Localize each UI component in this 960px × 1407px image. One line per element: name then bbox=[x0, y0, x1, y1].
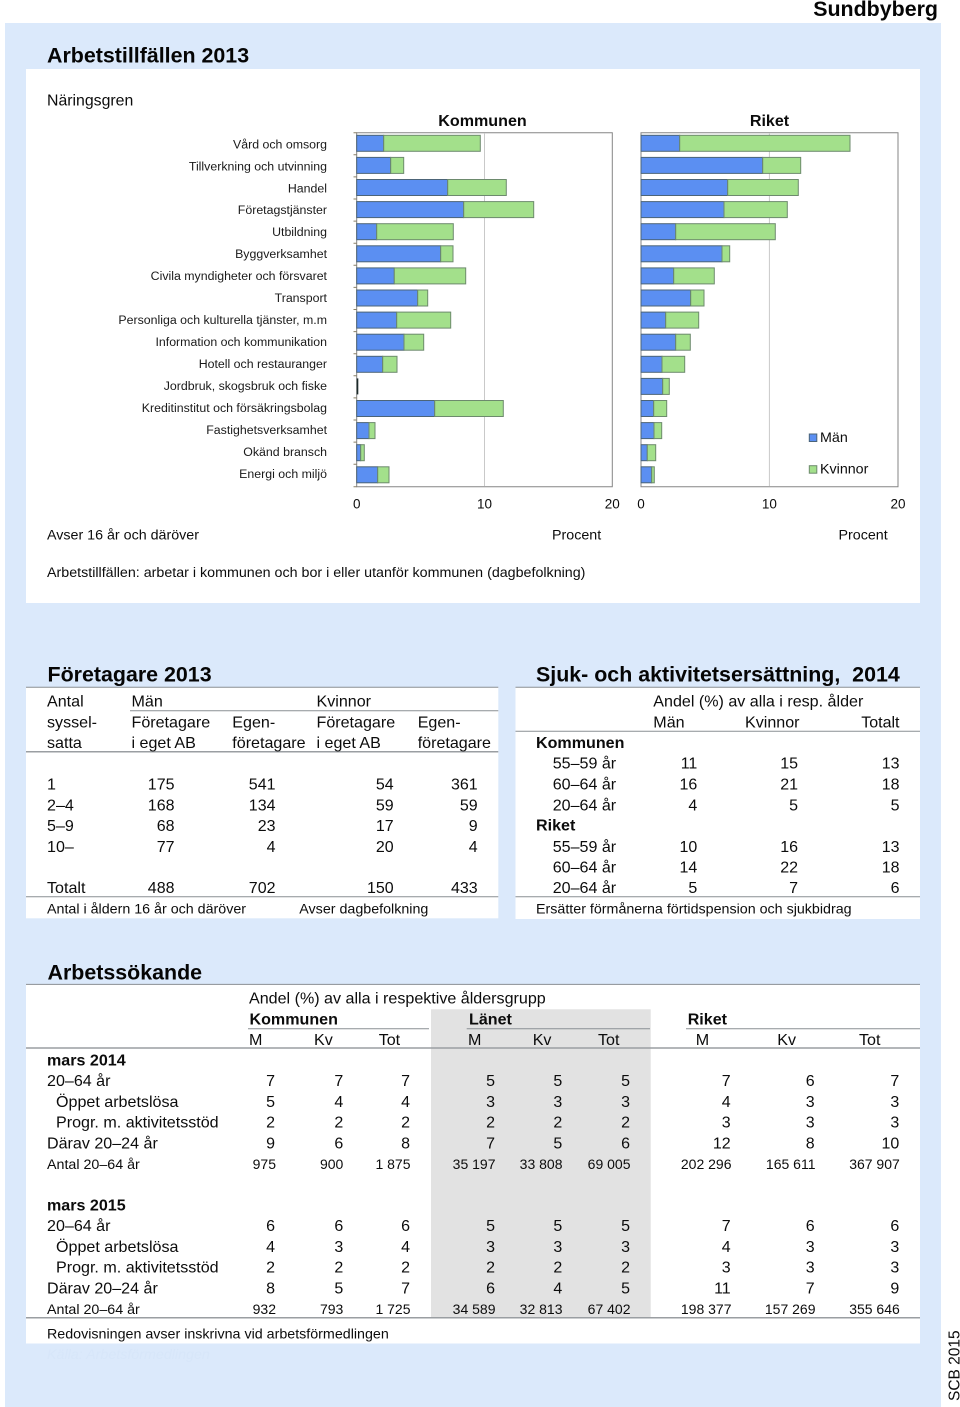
rows: mars 2015: 4 bbox=[266, 1239, 275, 1256]
rows: Riket: Riket bbox=[536, 817, 576, 835]
industry category labels: Information och kommunikation bbox=[155, 335, 327, 349]
rows: mars 2014 bbox=[47, 1052, 900, 1173]
rows: mars 2015: 5 bbox=[621, 1280, 630, 1298]
table rows: 54 bbox=[376, 776, 394, 794]
rows: mars 2015: 3 bbox=[890, 1260, 899, 1276]
rows: mars 2015: 4 bbox=[401, 1239, 410, 1256]
rows: mars 2014: 10 bbox=[882, 1136, 899, 1153]
panel: Arbetstillfällen 2013 bbox=[26, 43, 920, 603]
table rules bbox=[26, 984, 920, 1029]
rows: mars 2015: 932 bbox=[253, 1301, 276, 1317]
table header: Egen- bbox=[418, 713, 461, 731]
rows: mars 2014: 2 bbox=[553, 1114, 562, 1132]
rows: mars 2015: Antal 20–64 år bbox=[47, 1302, 140, 1318]
rows: mars 2014: 7 bbox=[401, 1073, 410, 1090]
rows: mars 2014: 975 bbox=[253, 1156, 276, 1172]
rows: Riket: 6 bbox=[891, 880, 900, 897]
rows: mars 2014: 3 bbox=[806, 1114, 815, 1132]
table rows: 20 bbox=[376, 839, 394, 856]
rows: Riket: 18 bbox=[882, 860, 900, 876]
table header: Riket bbox=[688, 1011, 728, 1029]
rows: mars 2014: 20–64 år bbox=[47, 1072, 111, 1090]
rows: mars 2015: 355 646 bbox=[849, 1301, 900, 1317]
table footnotes bbox=[47, 901, 428, 917]
table header: M bbox=[249, 1031, 262, 1049]
rows: mars 2015: 34 589 bbox=[453, 1301, 496, 1317]
rows: mars 2015: 3 bbox=[806, 1260, 815, 1276]
white card for job seekers table bbox=[26, 984, 920, 1344]
rows: mars 2014: 1 875 bbox=[375, 1156, 411, 1172]
rows: mars 2015: 3 bbox=[553, 1239, 562, 1256]
rows: mars 2014: 7 bbox=[722, 1073, 731, 1090]
rows: mars 2014: Antal 20–64 år bbox=[47, 1157, 140, 1173]
rows: mars 2015: Öppet arbetslösa bbox=[56, 1238, 179, 1256]
rows: mars 2014: 8 bbox=[806, 1136, 815, 1153]
table footnote: Ersätter förmånerna förtidspension och sjukbidrag bbox=[536, 901, 852, 917]
rows: mars 2014: 3 bbox=[621, 1094, 630, 1111]
rows: Riket: 7 bbox=[789, 880, 798, 897]
white card for employment chart bbox=[26, 69, 920, 603]
bar chart: Kommunen: Kommunen bbox=[438, 112, 527, 130]
rows: mars 2014: Progr. m. aktivitetsstöd bbox=[56, 1114, 219, 1132]
industry category labels: Handel bbox=[288, 181, 327, 195]
table rows: 4 bbox=[267, 839, 276, 856]
rows: mars 2014: 5 bbox=[486, 1073, 495, 1090]
rows: mars 2014: 7 bbox=[334, 1073, 343, 1090]
rows: mars 2015: 2 bbox=[486, 1260, 495, 1276]
table rows: 5–9 bbox=[47, 817, 74, 835]
rows: mars 2014: 3 bbox=[486, 1094, 495, 1111]
rows: mars 2014: 4 bbox=[401, 1094, 410, 1111]
industry category labels: Transport bbox=[275, 291, 328, 305]
rows: mars 2014: 4 bbox=[722, 1094, 731, 1111]
rows: mars 2015: mars 2015 bbox=[47, 1196, 126, 1214]
table header: i eget AB bbox=[316, 734, 381, 752]
table header: Kv bbox=[777, 1031, 796, 1049]
rows: mars 2014: 69 005 bbox=[588, 1156, 631, 1172]
rows: mars 2015: 3 bbox=[486, 1239, 495, 1256]
industry category labels: Hotell och restauranger bbox=[199, 357, 327, 371]
industry category labels: Tillverkning och utvinning bbox=[189, 159, 327, 173]
table header: Egen- bbox=[232, 713, 275, 731]
header rules bbox=[26, 1048, 920, 1318]
rows: mars 2014: 165 611 bbox=[766, 1156, 816, 1172]
table header bbox=[47, 692, 491, 752]
table rows: 1 bbox=[47, 776, 56, 794]
rows: Kommunen: 4 bbox=[688, 797, 697, 814]
rows: Kommunen: 13 bbox=[882, 756, 900, 773]
rows: mars 2015: 8 bbox=[266, 1280, 275, 1298]
rows: mars 2014: 2 bbox=[621, 1114, 630, 1132]
industry category labels: Företagstjänster bbox=[238, 203, 327, 217]
table header: Kv bbox=[533, 1031, 551, 1049]
chart footnotes bbox=[47, 528, 888, 581]
chart footnotes: Avser 16 år och däröver bbox=[47, 528, 199, 544]
table header: Företagare bbox=[316, 713, 395, 731]
rows: Kommunen: 55–59 år bbox=[553, 755, 617, 773]
rows: mars 2015: 7 bbox=[806, 1280, 815, 1298]
rows: Riket: 55–59 år bbox=[553, 838, 617, 856]
rows: mars 2015: 2 bbox=[334, 1260, 343, 1276]
table header: Kv bbox=[314, 1031, 333, 1049]
legend: Män bbox=[820, 430, 848, 446]
table rows: 9 bbox=[469, 818, 478, 835]
table header: M bbox=[468, 1031, 481, 1049]
rows: mars 2014: 6 bbox=[621, 1136, 630, 1153]
industry category labels: Utbildning bbox=[272, 225, 327, 239]
rows: mars 2014: 33 808 bbox=[520, 1156, 563, 1172]
rows: mars 2014: 900 bbox=[320, 1156, 344, 1172]
heading: Arbetstillfällen 2013: Arbetstillfällen 2013 bbox=[47, 43, 249, 67]
rows: mars 2014: 202 296 bbox=[681, 1156, 732, 1172]
table rows: 59 bbox=[460, 797, 478, 814]
rows: mars 2014: 3 bbox=[722, 1114, 731, 1132]
rows: Riket: 10 bbox=[680, 839, 697, 856]
legend bbox=[809, 430, 869, 478]
table rows: 541 bbox=[249, 776, 276, 794]
heading: Sjuk- och aktivitetsersättning: Sjuk- och aktivitetsersättning, 2014 bbox=[536, 663, 900, 687]
rows: mars 2014: Därav 20–24 år bbox=[47, 1135, 158, 1153]
rows: mars 2015: 7 bbox=[401, 1280, 410, 1298]
rows: Riket bbox=[536, 817, 900, 897]
industry category labels: Okänd bransch bbox=[243, 445, 327, 459]
table header: Kommunen bbox=[250, 1011, 338, 1029]
rows: mars 2015: 2 bbox=[401, 1260, 410, 1276]
table header bbox=[653, 693, 900, 731]
table rows: 68 bbox=[157, 818, 175, 835]
table header: Män bbox=[132, 692, 163, 710]
rows: mars 2015: 5 bbox=[334, 1280, 343, 1298]
industry category labels bbox=[118, 137, 328, 481]
rows: mars 2015: 2 bbox=[266, 1260, 275, 1276]
table rows: 134 bbox=[249, 797, 276, 814]
rows: Kommunen: 21 bbox=[780, 776, 798, 794]
rows: mars 2015: 6 bbox=[890, 1218, 899, 1235]
table header: Kvinnor bbox=[745, 713, 800, 731]
rows: Kommunen: 15 bbox=[780, 756, 798, 773]
industry category labels: Fastighetsverksamhet bbox=[206, 423, 328, 437]
rows: mars 2015: 20–64 år bbox=[47, 1217, 111, 1235]
table header: Länet bbox=[469, 1011, 513, 1029]
rows: mars 2015: 793 bbox=[320, 1301, 344, 1317]
table header: företagare bbox=[418, 734, 491, 752]
table header: syssel- bbox=[47, 713, 97, 731]
bar chart: Kommunen: 10 bbox=[477, 496, 492, 511]
header rule bbox=[26, 751, 498, 753]
rows: mars 2014: 3 bbox=[553, 1094, 562, 1111]
table header: Tot bbox=[859, 1031, 881, 1049]
table header bbox=[249, 990, 881, 1049]
table footnotes: Avser dagbefolkning bbox=[299, 901, 428, 917]
industry category labels: Jordbruk, skogsbruk och fiske bbox=[164, 379, 327, 393]
rows: mars 2014: 5 bbox=[266, 1094, 275, 1111]
rows: mars 2014: 2 bbox=[334, 1114, 343, 1132]
rows: mars 2015: 6 bbox=[334, 1218, 343, 1235]
table rows: 4 bbox=[469, 839, 478, 856]
rows: mars 2015: 67 402 bbox=[588, 1301, 631, 1317]
rows: mars 2015: 6 bbox=[486, 1280, 495, 1298]
table rows: 59 bbox=[376, 797, 394, 814]
rows: mars 2014: 5 bbox=[553, 1136, 562, 1153]
rows: Kommunen: 11 bbox=[681, 756, 697, 773]
rows: Kommunen: 5 bbox=[789, 797, 798, 814]
bar chart: Kommunen: 0 bbox=[353, 496, 360, 511]
rows: mars 2014: 7 bbox=[486, 1136, 495, 1153]
rows: mars 2015: 32 813 bbox=[520, 1301, 563, 1317]
heading: Företagare 2013: Företagare 2013 bbox=[48, 663, 212, 687]
rows: mars 2015: 9 bbox=[890, 1280, 899, 1298]
rows: mars 2014: 8 bbox=[401, 1136, 410, 1153]
table header: Tot bbox=[379, 1031, 401, 1049]
rows: mars 2015: 2 bbox=[553, 1260, 562, 1276]
table footnotes: Antal i åldern 16 år och däröver bbox=[47, 901, 246, 917]
table header: Andel (%) av alla i resp. ålder bbox=[653, 693, 864, 711]
rows: mars 2015: 1 725 bbox=[375, 1301, 411, 1317]
rows: mars 2015: 157 269 bbox=[765, 1301, 816, 1317]
white card for entrepreneurs table bbox=[26, 687, 498, 918]
bar chart: Riket: 20 bbox=[890, 496, 906, 511]
rows: mars 2015: Progr. m. aktivitetsstöd bbox=[56, 1258, 219, 1276]
rows: mars 2014: 2 bbox=[486, 1114, 495, 1132]
rows: mars 2015: Därav 20–24 år bbox=[47, 1280, 158, 1298]
rows: Riket: 60–64 år bbox=[553, 858, 617, 876]
industry category labels: Kreditinstitut och försäkringsbolag bbox=[142, 401, 327, 415]
table rows: 702 bbox=[249, 880, 276, 897]
table rules bbox=[26, 687, 498, 897]
rows: mars 2014: 6 bbox=[334, 1136, 343, 1153]
table rows: 433 bbox=[451, 880, 478, 897]
table rows: 175 bbox=[148, 776, 175, 794]
rows: mars 2014: 367 907 bbox=[849, 1156, 900, 1172]
panel: Företagare 2013 bbox=[26, 663, 498, 918]
table rows: 23 bbox=[258, 818, 276, 835]
rows: mars 2015: 11 bbox=[714, 1280, 731, 1298]
rows: mars 2015: 6 bbox=[401, 1218, 410, 1235]
rows: mars 2015: 4 bbox=[722, 1239, 731, 1256]
rows: Riket: 20–64 år bbox=[553, 879, 617, 897]
rows: mars 2014: 6 bbox=[806, 1073, 815, 1090]
rows: mars 2014: Öppet arbetslösa bbox=[56, 1093, 179, 1111]
bar chart: Kommunen: 20 bbox=[605, 496, 620, 511]
chart footnotes: Procent bbox=[838, 528, 888, 544]
table header: i eget AB bbox=[132, 734, 196, 752]
industry category labels: Vård och omsorg bbox=[233, 137, 327, 151]
rows: mars 2015: 2 bbox=[621, 1260, 630, 1276]
rows: mars 2015: 198 377 bbox=[681, 1301, 732, 1317]
source note (faint): Källa: Arbetsförmedlingen bbox=[47, 1347, 210, 1363]
table rows: Totalt bbox=[47, 879, 86, 897]
rows: mars 2015: 5 bbox=[553, 1218, 562, 1235]
table rows: 168 bbox=[148, 797, 175, 814]
bar chart: Riket: 10 bbox=[762, 496, 777, 511]
industry category labels: Byggverksamhet bbox=[235, 247, 328, 261]
rows: mars 2014: 2 bbox=[401, 1114, 410, 1132]
table rows: 77 bbox=[157, 839, 175, 856]
table header: M bbox=[696, 1031, 709, 1049]
rows: mars 2014: 2 bbox=[266, 1114, 275, 1132]
heading: Arbetssökande: Arbetssökande bbox=[48, 960, 202, 984]
table rows: 10– bbox=[47, 838, 74, 856]
rows: mars 2015: 7 bbox=[722, 1218, 731, 1235]
table header: Totalt bbox=[861, 714, 900, 731]
industry category labels: Personliga och kulturella tjänster, m.m bbox=[118, 313, 327, 327]
rows: mars 2015: 5 bbox=[486, 1218, 495, 1235]
table rows: 17 bbox=[376, 818, 394, 835]
table header: Företagare bbox=[132, 713, 210, 731]
rows: Kommunen: 16 bbox=[680, 776, 697, 794]
table header: Tot bbox=[598, 1031, 620, 1049]
rows: mars 2014: 3 bbox=[806, 1094, 815, 1111]
rows: Kommunen bbox=[536, 734, 900, 814]
rows: mars 2015 bbox=[47, 1196, 900, 1318]
table header: företagare bbox=[232, 734, 306, 752]
chart footnotes: Procent bbox=[552, 528, 601, 544]
rows: mars 2014: 7 bbox=[266, 1073, 275, 1090]
rows: mars 2015: 4 bbox=[553, 1280, 562, 1298]
rows: Riket: 16 bbox=[780, 839, 798, 856]
rows: Kommunen: 60–64 år bbox=[553, 776, 617, 794]
table footnote: Redovisningen avser inskrivna vid arbetsförmedlingen bbox=[47, 1326, 389, 1342]
subheading: Näringsgren: Näringsgren bbox=[47, 92, 133, 109]
rows: Kommunen: 5 bbox=[891, 797, 900, 814]
white card for sickness benefit table bbox=[516, 687, 920, 919]
rows: mars 2015: 3 bbox=[806, 1239, 815, 1256]
rows: mars 2015: 3 bbox=[890, 1239, 899, 1256]
rows: mars 2014: 35 197 bbox=[453, 1156, 496, 1172]
rows: Riket: 5 bbox=[688, 880, 697, 897]
table rows: 488 bbox=[148, 880, 175, 897]
bar chart: Riket: 0 bbox=[637, 496, 645, 511]
table header: Kvinnor bbox=[316, 692, 372, 710]
rows: mars 2014: 3 bbox=[890, 1114, 899, 1132]
rows: mars 2015: 3 bbox=[722, 1260, 731, 1276]
rows: mars 2014: 3 bbox=[890, 1094, 899, 1111]
rows: mars 2014: mars 2014 bbox=[47, 1052, 126, 1070]
bar chart: Kommunen bbox=[353, 112, 620, 511]
table rows bbox=[47, 776, 478, 897]
rows: mars 2014: 4 bbox=[334, 1094, 343, 1111]
panel: Arbetssökande bbox=[26, 960, 920, 1344]
rows: mars 2015: 3 bbox=[334, 1239, 343, 1256]
industry category labels: Energi och miljö bbox=[239, 467, 327, 481]
panel: Sjuk- och aktivitetsersättning 2014 bbox=[516, 663, 920, 919]
rows: Riket: 14 bbox=[680, 860, 697, 876]
rows: Riket: 13 bbox=[882, 839, 900, 856]
rows: mars 2015: 3 bbox=[621, 1239, 630, 1256]
rows: mars 2014: 7 bbox=[890, 1073, 899, 1090]
table header: Antal bbox=[47, 692, 84, 710]
bar chart: Riket: Riket bbox=[750, 112, 790, 130]
rows: Riket: 22 bbox=[780, 860, 798, 876]
table header: Män bbox=[653, 713, 685, 731]
shaded column: Länet bbox=[431, 1009, 651, 1318]
rows: mars 2014: 5 bbox=[621, 1073, 630, 1090]
rows: mars 2014: 9 bbox=[266, 1136, 275, 1153]
table rows: 2–4 bbox=[47, 796, 74, 814]
industry category labels: Civila myndigheter och försvaret bbox=[151, 269, 328, 283]
chart footnotes: Arbetstillfällen: arbetar i kommunen och bor i eller utanför kommunen (dagbefolkning) bbox=[47, 565, 585, 581]
table header: Andel (%) av alla i respektive åldersgrupp bbox=[249, 990, 546, 1008]
rows: mars 2015: 5 bbox=[621, 1218, 630, 1235]
bar chart: Riket bbox=[637, 112, 906, 511]
legend: Kvinnor bbox=[820, 462, 869, 478]
rows: Kommunen: 20–64 år bbox=[553, 796, 617, 814]
rows: Kommunen: 18 bbox=[882, 776, 900, 794]
table rows: 150 bbox=[367, 880, 394, 897]
table rules bbox=[516, 687, 920, 897]
rows: Kommunen: Kommunen bbox=[536, 734, 624, 752]
rows: mars 2015: 6 bbox=[806, 1218, 815, 1235]
table rows: 361 bbox=[451, 776, 478, 794]
table header: satta bbox=[47, 734, 82, 752]
rows: mars 2015: 6 bbox=[266, 1218, 275, 1235]
rows: mars 2014: 12 bbox=[713, 1136, 731, 1153]
rows: mars 2014: 5 bbox=[553, 1073, 562, 1090]
